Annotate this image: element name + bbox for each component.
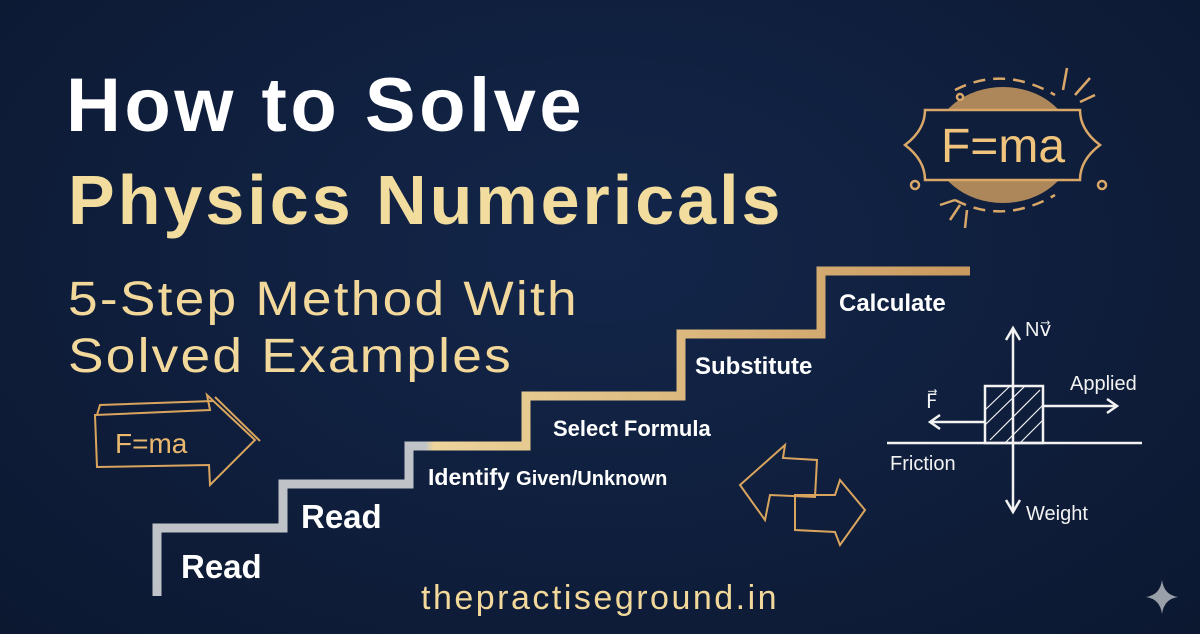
force diagram: Friction (890, 453, 956, 475)
icon: F=ma emblem: F=ma (941, 120, 1065, 173)
text: Select Formula (553, 416, 711, 441)
icon: double arrows (738, 442, 866, 547)
title line 1: How to Solve (66, 63, 585, 148)
force diagram (887, 319, 1142, 525)
icon: F=ma emblem (903, 68, 1108, 228)
text: Calculate (839, 290, 946, 317)
subtitle: Solved Examples (68, 330, 513, 383)
text: Substitute (695, 353, 812, 380)
title line 2: Physics Numericals (68, 161, 783, 239)
text: Identify Given/Unknown (428, 464, 667, 490)
force diagram: Weight (1026, 503, 1088, 525)
subtitle (68, 273, 579, 383)
step labels: Read (181, 548, 262, 585)
subtitle: 5-Step Method With (68, 273, 579, 326)
footer url: thepractiseground.in (421, 579, 779, 617)
icon: F=ma arrow: F=ma (115, 428, 188, 459)
force diagram: Nv⃗ (1025, 319, 1051, 341)
force diagram: Applied (1070, 373, 1137, 395)
icon: F=ma arrow (94, 392, 261, 488)
icon: sparkle (1146, 580, 1178, 614)
force diagram: F⃗ (926, 388, 938, 413)
text: Read (301, 498, 382, 535)
